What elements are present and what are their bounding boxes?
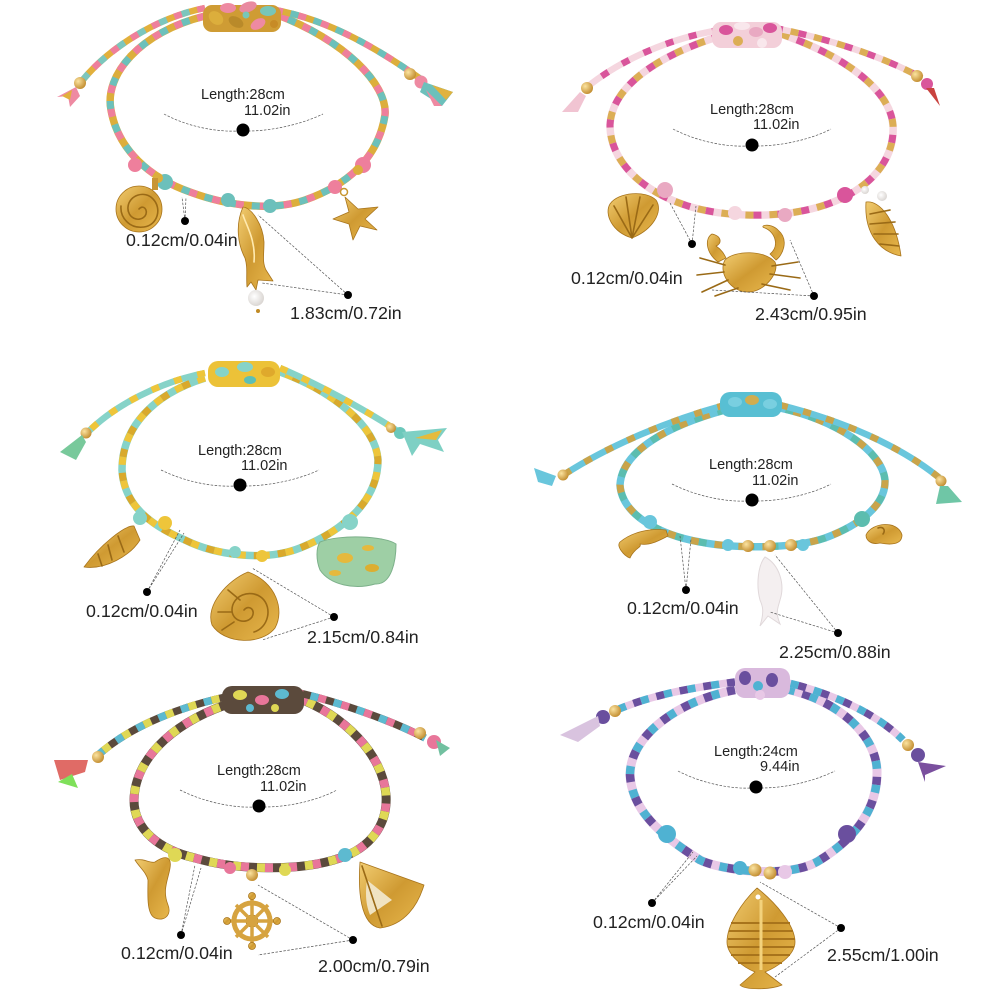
measure: length: 11.02in <box>241 458 288 474</box>
tail ends and beads <box>54 727 450 788</box>
measure: cord width <box>627 536 739 618</box>
knot <box>735 668 790 700</box>
tail ends and beads <box>560 705 946 782</box>
measure: cord width <box>121 865 233 963</box>
charm: conch <box>84 526 140 567</box>
side knots and beads <box>658 825 856 880</box>
measure: length: Length:28cm <box>217 763 301 779</box>
measure: length: Length:28cm <box>201 87 285 103</box>
measure: charm size <box>760 882 939 977</box>
measure: cord width <box>126 197 238 250</box>
charm: shell <box>866 524 902 544</box>
side knots <box>133 511 358 562</box>
charm: fish skeleton <box>727 888 795 989</box>
knot <box>712 22 782 48</box>
tail ends and beads <box>534 468 962 504</box>
charm: shell <box>608 194 659 238</box>
measure: length <box>164 87 323 136</box>
bracelet 1: pink and yellow <box>57 0 453 323</box>
tail ends and beads <box>562 70 940 112</box>
measure: charm size <box>258 215 402 323</box>
measure: length: Length:24cm <box>714 744 798 760</box>
measure: cord width <box>571 203 696 288</box>
measure: charm size: 2.55cm/1.00in <box>827 945 939 965</box>
measure: charm size <box>258 885 430 976</box>
charm: sailboat <box>359 862 424 928</box>
measure: length <box>180 763 337 812</box>
side knots <box>657 182 869 222</box>
measure: charm size: 2.00cm/0.79in <box>318 956 430 976</box>
measure: cord width: 0.12cm/0.04in <box>627 598 739 618</box>
measure: cord width: 0.12cm/0.04in <box>121 943 233 963</box>
charm: claw <box>619 530 668 558</box>
measure: charm size: 2.15cm/0.84in <box>307 627 419 647</box>
side knots <box>168 848 352 881</box>
measure: length: Length:28cm <box>709 457 793 473</box>
braided cord <box>612 680 903 872</box>
charm: ship wheel <box>224 892 280 950</box>
measure: length: 11.02in <box>244 103 290 119</box>
measure: charm size <box>712 240 867 324</box>
bracelet 5: dark multicolour <box>54 686 450 976</box>
charm: whale tail <box>135 858 170 919</box>
measure: charm size: 1.83cm/0.72in <box>290 303 402 323</box>
side knots and beads <box>643 511 870 552</box>
measure: cord width: 0.12cm/0.04in <box>571 268 683 288</box>
measure: cord width <box>593 852 705 932</box>
knot <box>720 392 782 417</box>
measure: charm size <box>252 568 419 647</box>
bracelet 2: pink and white <box>562 22 940 324</box>
measure: cord width <box>86 530 198 621</box>
bracelet 4: sky blue <box>534 392 962 662</box>
braided cord <box>586 28 922 215</box>
knot <box>203 0 281 32</box>
measure: length: Length:28cm <box>710 102 794 118</box>
side knots <box>128 157 371 213</box>
tail ends and beads <box>57 68 453 107</box>
measure: cord width: 0.12cm/0.04in <box>593 912 705 932</box>
measure: cord width: 0.12cm/0.04in <box>86 601 198 621</box>
measure: length <box>673 102 831 152</box>
braided cord <box>78 8 425 206</box>
measure: length: Length:28cm <box>198 443 282 459</box>
measure: cord width: 0.12cm/0.04in <box>126 230 238 250</box>
measure: length: 11.02in <box>260 779 306 795</box>
charm: conch <box>866 191 901 256</box>
bracelet 6: lavender and blue <box>560 668 946 989</box>
measure: length: 9.44in <box>760 759 800 775</box>
bracelet 3: teal and yellow <box>60 361 447 647</box>
measure: length <box>678 744 835 794</box>
measure: length <box>672 457 831 506</box>
braided cord <box>96 692 425 868</box>
measure: charm size <box>770 555 891 662</box>
charm: ammonite <box>211 572 279 640</box>
charm: crab <box>697 225 800 296</box>
charm: fish <box>238 207 273 313</box>
tail ends and beads <box>60 423 447 460</box>
braided cord <box>565 405 942 547</box>
charm: starfish <box>333 188 378 240</box>
measure: charm size: 2.25cm/0.88in <box>779 642 891 662</box>
knot <box>208 361 280 387</box>
measure: length: 11.02in <box>752 473 798 489</box>
measure: length <box>161 443 319 492</box>
knot <box>222 686 304 714</box>
measure: charm size: 2.43cm/0.95in <box>755 304 867 324</box>
charm: green stone <box>317 537 396 586</box>
charm: white fish <box>758 557 782 626</box>
charm: spiral disc <box>116 178 162 232</box>
measure: length: 11.02in <box>753 117 800 133</box>
braided cord <box>88 368 396 556</box>
